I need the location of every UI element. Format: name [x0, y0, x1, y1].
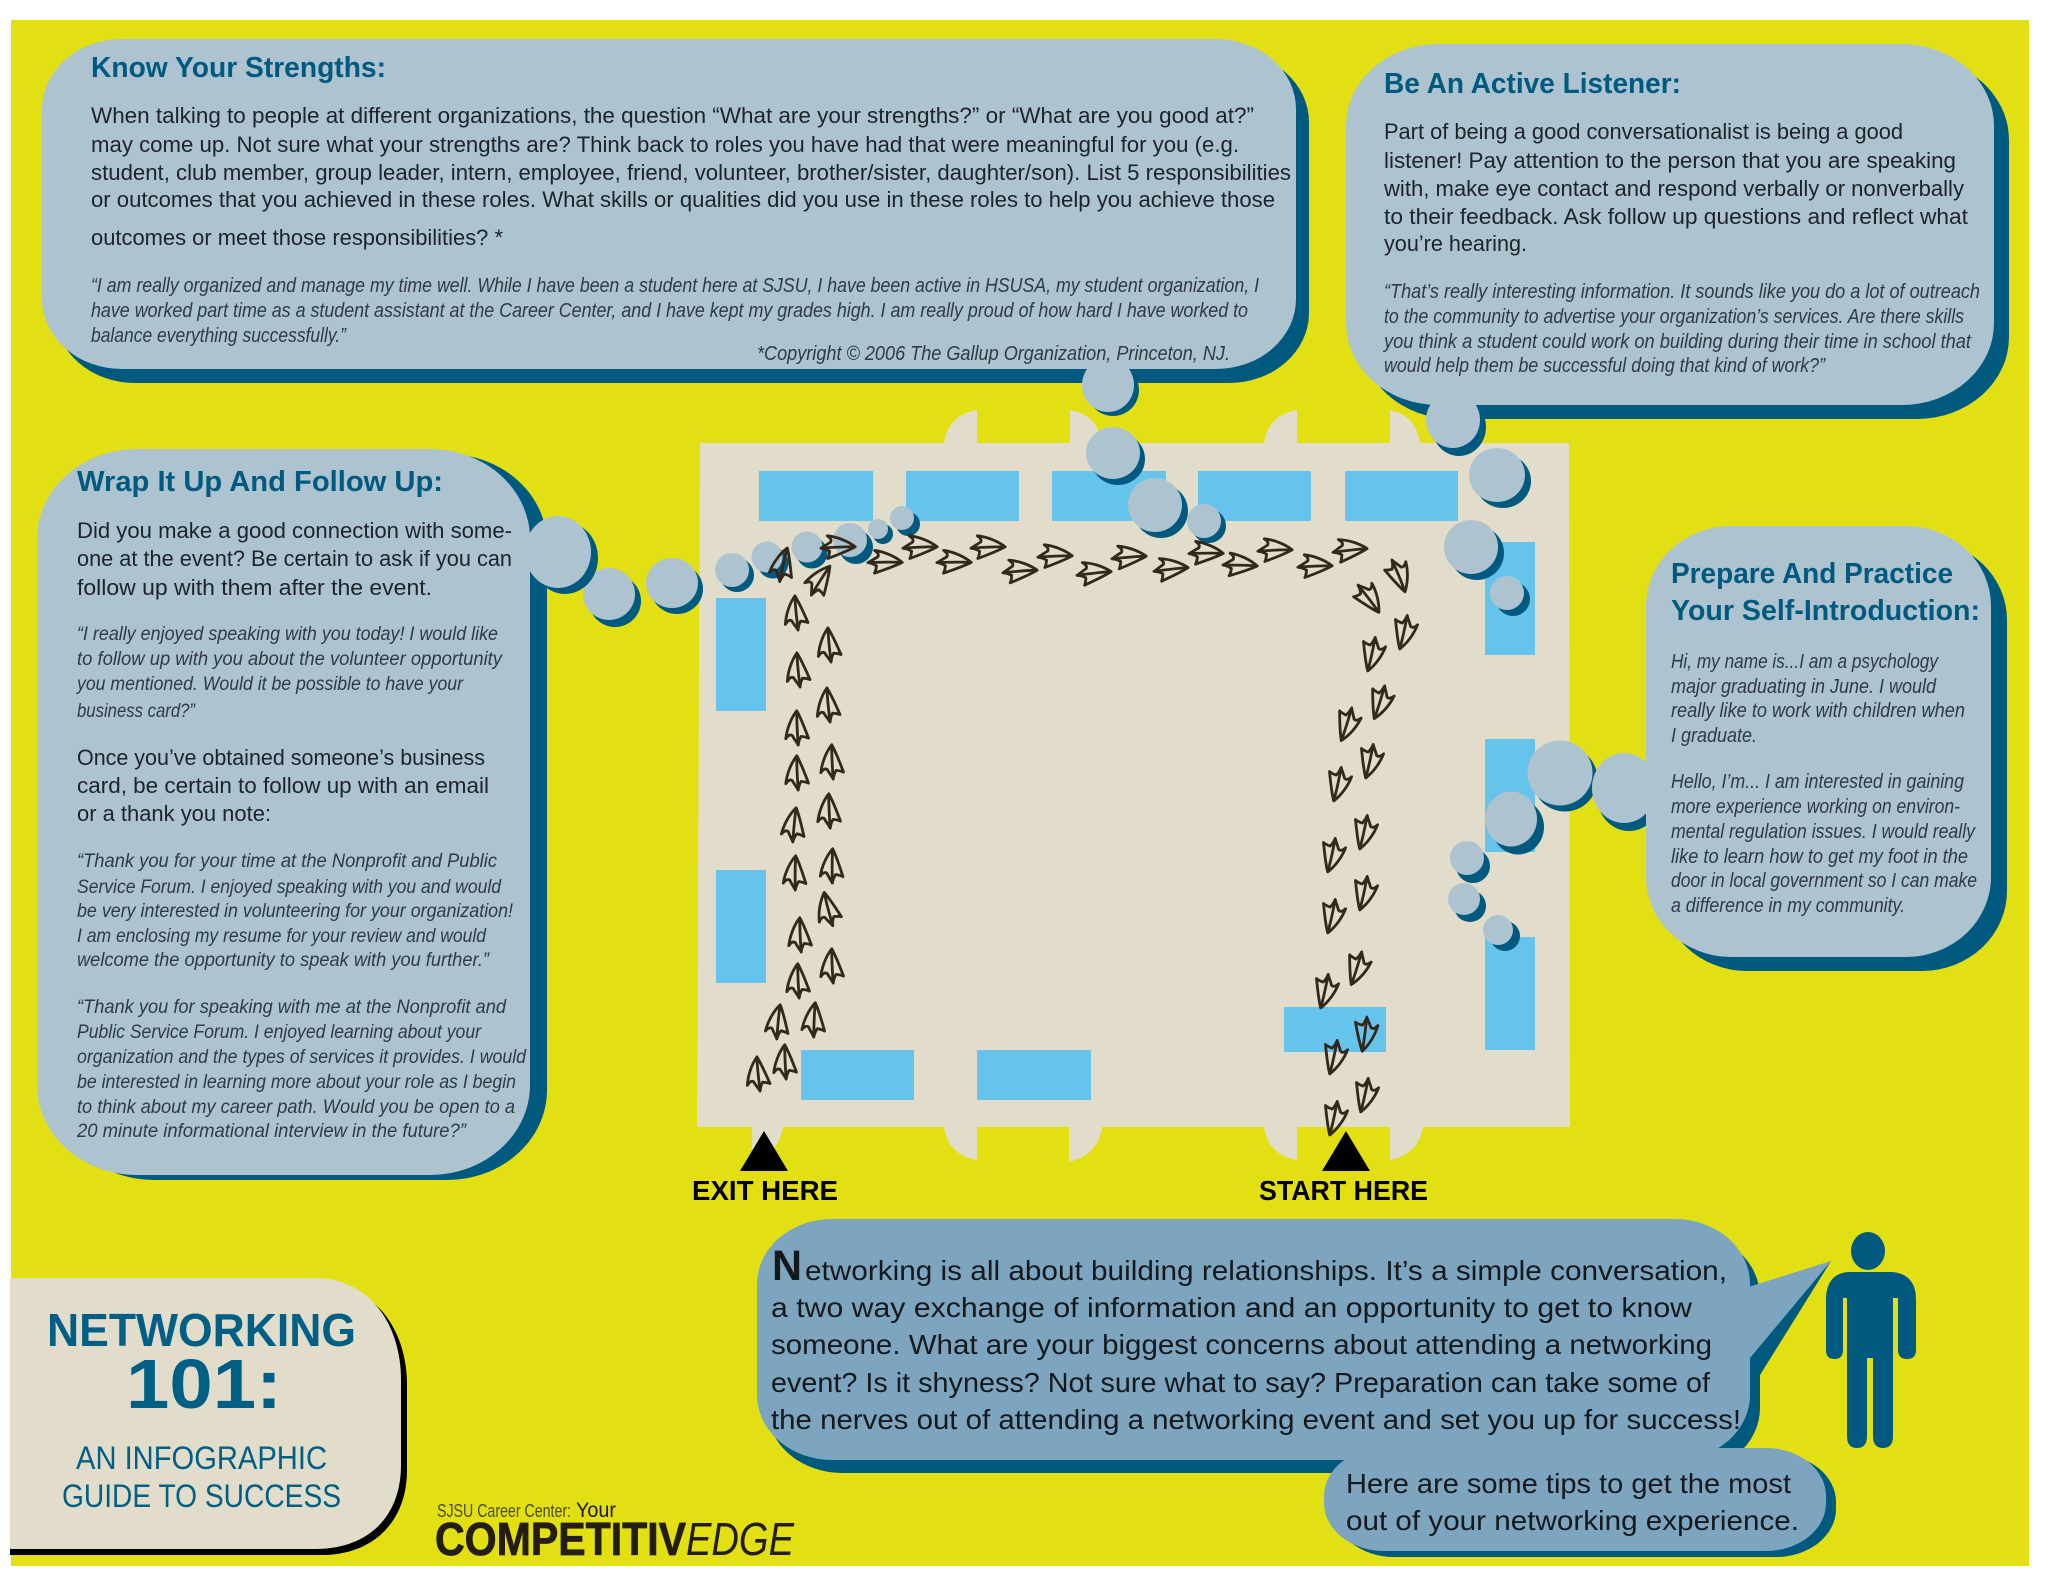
- example quote three: Public Service Forum. I enjoyed learning about your: [77, 1022, 482, 1043]
- example introduction one: really like to work with children when: [1671, 700, 1965, 722]
- body text: a two way exchange of information and an opportunity to get to know: [771, 1292, 1693, 1323]
- example quote: [91, 275, 1259, 347]
- heading: Wrap It Up And Follow Up:: [77, 466, 443, 498]
- exit marker: [692, 1131, 838, 1206]
- tips text: out of your networking experience.: [1346, 1505, 1799, 1536]
- tips text: Here are some tips to get the most: [1346, 1468, 1791, 1499]
- heading: Your Self-Introduction:: [1671, 595, 1980, 627]
- body text: [771, 1242, 1741, 1435]
- body text: [91, 103, 1291, 250]
- body text: When talking to people at different organizations, the question “What are your strengths?” or “What are you good at?”: [91, 103, 1254, 128]
- speech bubble: introduction: [757, 1219, 1831, 1473]
- footprints: right column: [1307, 557, 1419, 1138]
- body text: N: [772, 1242, 802, 1290]
- example quote one: [75, 624, 503, 722]
- thought bubble dots: strengths chain: [1086, 427, 1226, 543]
- panel: be an active listener: [1346, 44, 2009, 456]
- logo: your competitive edge: Your: [576, 1499, 616, 1522]
- example quote two: “Thank you for your time at the Nonprofit and Public: [77, 851, 497, 872]
- heading: Prepare And Practice: [1671, 558, 1953, 590]
- thought bubble dots: self-introduction chain: [1448, 740, 1598, 951]
- example quote one: you mentioned. Would it be possible to have your: [75, 674, 464, 695]
- logo: your competitive edge: COMPETITIV: [435, 1513, 686, 1565]
- title panel: [10, 1278, 407, 1555]
- example quote: to the community to advertise your organization’s services. Are there skills: [1384, 306, 1964, 328]
- example introduction two: like to learn how to get my foot in the: [1671, 846, 1968, 868]
- body text: to their feedback. Ask follow up questions and reflect what: [1384, 204, 1968, 229]
- example quote two: Service Forum. I enjoyed speaking with you and would: [77, 877, 502, 898]
- panel: prepare and practice your self-introduction: [1592, 526, 2007, 971]
- subtitle: GUIDE TO SUCCESS: [62, 1478, 341, 1514]
- body text: listener! Pay attention to the person that you are speaking: [1384, 148, 1956, 173]
- example quote two: be very interested in volunteering for your organization!: [77, 901, 514, 922]
- body text: Part of being a good conversationalist is being a good: [1384, 119, 1903, 144]
- body text: event? Is it shyness? Not sure what to say? Preparation can take some of: [771, 1367, 1710, 1398]
- body text: etworking is all about building relationships. It’s a simple conversation,: [805, 1255, 1727, 1286]
- example introduction two: a difference in my community.: [1671, 895, 1905, 917]
- body text two: card, be certain to follow up with an email: [77, 773, 489, 798]
- panel: wrap it up and follow up: [37, 449, 598, 1180]
- example introduction one: major graduating in June. I would: [1671, 676, 1937, 698]
- example introduction two: mental regulation issues. I would really: [1671, 821, 1976, 843]
- exit marker: EXIT HERE: [692, 1175, 838, 1206]
- example introduction one: [1671, 651, 1965, 747]
- example quote three: organization and the types of services it provides. I would: [77, 1047, 527, 1068]
- speech bubble: tips: [1324, 1448, 1836, 1557]
- heading: Know Your Strengths:: [91, 52, 386, 84]
- example quote one: business card?”: [77, 701, 196, 722]
- example quote three: “Thank you for speaking with me at the Nonprofit and: [77, 997, 507, 1018]
- example introduction two: Hello, I’m... I am interested in gaining: [1671, 771, 1964, 793]
- body text: or outcomes that you achieved in these roles. What skills or qualities did you use in these roles to help you achieve those: [91, 187, 1275, 212]
- body text: may come up. Not sure what your strengths are? Think back to roles you have had that were meaningful for you (e.g.: [91, 132, 1239, 157]
- body text: the nerves out of attending a networking event and set you up for success!: [771, 1404, 1741, 1435]
- example introduction two: more experience working on environ-: [1671, 796, 1960, 818]
- subtitle: AN INFOGRAPHIC: [76, 1440, 327, 1476]
- example quote two: welcome the opportunity to speak with you further.”: [77, 950, 491, 971]
- example quote two: I am enclosing my resume for your review and would: [77, 926, 487, 947]
- example introduction two: door in local government so I can make: [1671, 870, 1977, 892]
- body text two: Once you’ve obtained someone’s business: [77, 745, 485, 770]
- thought bubble dots: listener chain: [1444, 448, 1531, 616]
- example quote: “I am really organized and manage my time well. While I have been a student here at SJSU, I have been active in HSUSA, my student organization, I: [91, 275, 1259, 297]
- body text: [1383, 119, 1968, 256]
- example introduction one: Hi, my name is...I am a psychology: [1671, 651, 1939, 673]
- example quote one: “I really enjoyed speaking with you today! I would like: [77, 624, 498, 645]
- example quote: would help them be successful doing that kind of work?”: [1384, 355, 1826, 377]
- body text one: Did you make a good connection with some-: [77, 518, 512, 543]
- footprints: left column: [747, 545, 847, 1092]
- example quote: “That’s really interesting information. It sounds like you do a lot of outreach: [1384, 281, 1980, 303]
- body text: outcomes or meet those responsibilities? *: [91, 225, 503, 250]
- tips text: [1346, 1468, 1799, 1536]
- example quote one: to follow up with you about the volunteer opportunity: [77, 649, 503, 670]
- example quote: balance everything successfully.”: [91, 325, 347, 347]
- panel: know your strengths: [42, 39, 1309, 416]
- body text two: or a thank you note:: [77, 801, 271, 826]
- body text: with, make eye contact and respond verbally or nonverbally: [1383, 176, 1964, 201]
- copyright note: *Copyright © 2006 The Gallup Organization, Princeton, NJ.: [757, 343, 1230, 365]
- example introduction two: [1671, 771, 1977, 917]
- logo: your competitive edge: [435, 1499, 795, 1565]
- body text two: [77, 745, 489, 826]
- example quote three: be interested in learning more about your role as I begin: [77, 1072, 516, 1093]
- floor plan: [697, 410, 1570, 1162]
- body text: someone. What are your biggest concerns about attending a networking: [771, 1329, 1712, 1360]
- subtitle: [62, 1440, 341, 1514]
- heading: Be An Active Listener:: [1384, 68, 1681, 100]
- footprints: top row: [820, 535, 1367, 586]
- example quote: have worked part time as a student assistant at the Career Center, and I have kept my grades high. I am really proud of how hard I have worked to: [91, 300, 1248, 322]
- title: NETWORKING: [47, 1304, 356, 1356]
- body text one: one at the event? Be certain to ask if you can: [77, 546, 512, 571]
- example quote three: 20 minute informational interview in the future?”: [76, 1121, 468, 1142]
- title number: 101:: [126, 1345, 282, 1423]
- logo: your competitive edge: EDGE: [686, 1513, 795, 1565]
- tables: [716, 471, 1535, 1100]
- body text one: follow up with them after the event.: [77, 575, 432, 600]
- heading: [1671, 558, 1980, 627]
- example quote: you think a student could work on building during their time in school that: [1382, 331, 1972, 353]
- body text one: [77, 518, 512, 600]
- thought bubble dots: follow-up chain: [583, 506, 920, 627]
- logo: your competitive edge: SJSU Career Center:: [437, 1501, 571, 1521]
- example quote two: [77, 851, 514, 971]
- example quote three: [76, 997, 527, 1142]
- start marker: [1259, 1131, 1428, 1206]
- icon: person: [1826, 1232, 1916, 1448]
- start marker: START HERE: [1259, 1175, 1428, 1206]
- body text: you’re hearing.: [1384, 231, 1527, 256]
- example introduction one: I graduate.: [1671, 725, 1757, 747]
- example quote three: to think about my career path. Would you be open to a: [77, 1097, 515, 1118]
- example quote: [1382, 281, 1980, 377]
- body text: student, club member, group leader, intern, employee, friend, volunteer, brother/sister, daughter/son). List 5 responsibilities: [91, 160, 1291, 185]
